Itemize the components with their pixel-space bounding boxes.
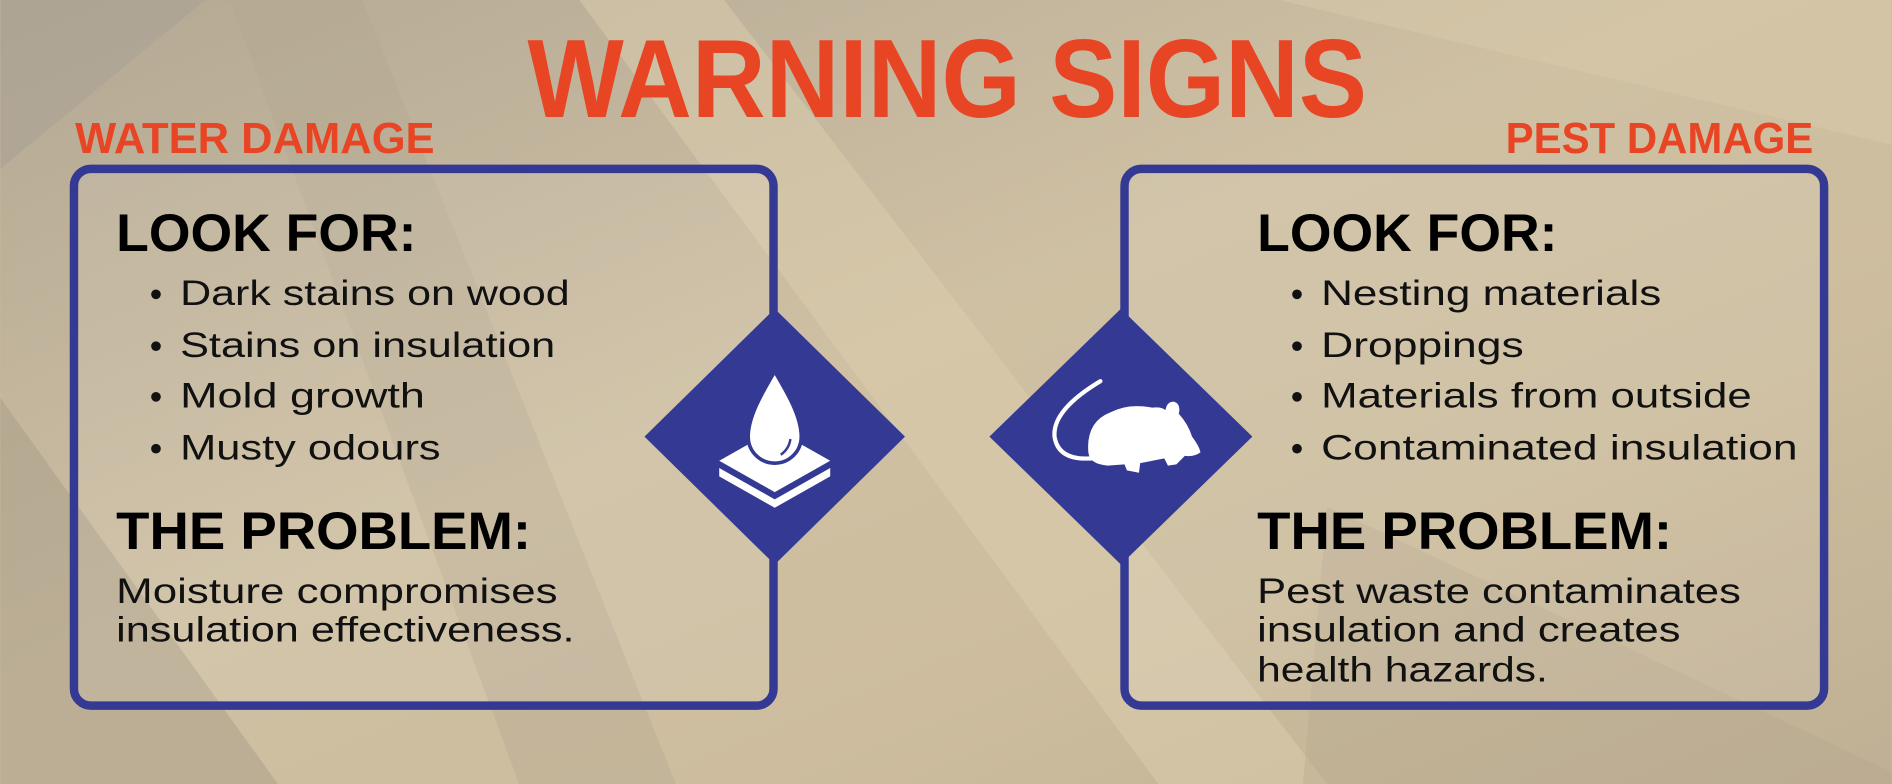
text: pest problem: [1257, 572, 1741, 689]
text: water problem: insulation effectiveness.: [116, 611, 575, 650]
heading: pest damage: PEST DAMAGE: [1506, 115, 1813, 163]
text: water problem: [116, 572, 575, 650]
heading: look for (water): LOOK FOR:: [116, 204, 416, 263]
list: water signs: Dark stains on wood: [180, 274, 570, 313]
text: pest problem: Pest waste contaminates: [1257, 572, 1741, 611]
list: pest signs: [1292, 274, 1798, 468]
list: water signs: Stains on insulation: [180, 326, 555, 365]
list: water signs: Musty odours: [180, 429, 441, 468]
icon: water drop on layers: [644, 309, 905, 564]
text: water problem: Moisture compromises: [116, 572, 558, 611]
list: pest signs: Nesting materials: [1321, 274, 1661, 313]
list: water signs: [151, 274, 570, 468]
panel: water damage: [74, 169, 774, 706]
list: pest signs: Droppings: [1321, 326, 1524, 365]
list: pest signs: Contaminated insulation: [1321, 429, 1798, 468]
icon: mouse: [989, 309, 1252, 564]
heading: water damage: WATER DAMAGE: [75, 115, 435, 163]
list: pest signs: Materials from outside: [1321, 377, 1752, 416]
heading: look for (pest): LOOK FOR:: [1257, 204, 1558, 263]
heading: the problem (water): THE PROBLEM:: [116, 502, 531, 561]
panel: pest damage: [1125, 169, 1824, 706]
text: pest problem: health hazards.: [1257, 650, 1548, 689]
heading: the problem (pest): THE PROBLEM:: [1257, 502, 1672, 561]
list: water signs: Mold growth: [180, 377, 425, 416]
text: pest problem: insulation and creates: [1257, 611, 1681, 650]
title: WARNING SIGNS: [527, 17, 1367, 141]
